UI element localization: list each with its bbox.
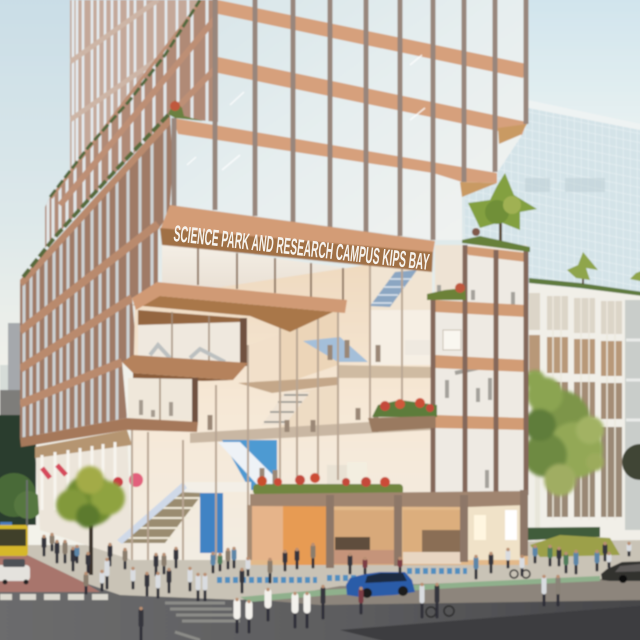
glass mullions (198, 248, 343, 300)
terrace greenery lower (23, 113, 170, 277)
bike lane red (0, 555, 100, 592)
crosswalk left (0, 594, 108, 600)
retail columns (330, 490, 524, 568)
windows row 3 (547, 382, 622, 419)
dark trees left (0, 415, 42, 525)
slab three (20, 418, 198, 447)
gravel band (260, 578, 640, 605)
planter flowers upper (372, 398, 437, 417)
front tower columns (174, 0, 526, 240)
plaza and road (0, 540, 640, 640)
upper tower left face (69, 0, 199, 171)
blue car (346, 572, 415, 598)
distant buildings left (0, 323, 22, 418)
terrace greenery mid (427, 283, 466, 300)
foliage (56, 466, 125, 528)
heads (44, 534, 629, 608)
storefront left wall (247, 505, 252, 560)
pedestrians (44, 534, 629, 640)
floor slab lower (190, 418, 432, 443)
big right tree (523, 370, 604, 548)
cyclists bikes (426, 570, 530, 617)
floor slab ground (185, 482, 251, 492)
atrium interior (130, 255, 432, 560)
slab two (122, 355, 248, 381)
terrace greenery upper (50, 0, 200, 197)
legs (44, 542, 629, 640)
bicycle racks (217, 571, 467, 580)
bay columns (433, 245, 526, 495)
stair upper (370, 270, 417, 307)
atrium right figures and boards (210, 340, 430, 487)
green lane (240, 576, 600, 602)
dark lower right road (340, 605, 640, 640)
blue mural lower (200, 493, 223, 553)
white coats (237, 592, 307, 616)
windows row 2 (529, 335, 622, 376)
ground floor left glass (35, 430, 143, 560)
tree on terrace (468, 173, 537, 241)
front tower bands (173, 0, 527, 183)
interior figures (439, 285, 513, 488)
right bays block (433, 245, 528, 495)
coloured tops (52, 537, 313, 584)
lamp post (26, 480, 28, 530)
window reflections (187, 55, 425, 170)
main sign band (160, 205, 435, 272)
atrium mullions (132, 258, 402, 560)
sky right (500, 0, 640, 140)
ground stair (117, 482, 203, 544)
sidewalk (27, 540, 640, 600)
foliage (523, 370, 604, 496)
planter slab upper (368, 416, 435, 432)
whiteboards (443, 330, 461, 350)
left street tree (56, 466, 125, 575)
yellow bus (0, 522, 28, 556)
retail soffit (250, 491, 527, 507)
glass between main band and slab (162, 243, 347, 300)
dark car right (601, 561, 640, 583)
small tree on white building roof (567, 252, 640, 284)
floor slab mid (238, 377, 337, 393)
wood soffit corner lower (460, 182, 497, 197)
wood soffit corner upper (498, 124, 527, 144)
terrace greenery right top (462, 228, 530, 252)
dark tops (44, 539, 605, 625)
windows row 4 (547, 427, 622, 517)
top terrace flowers (168, 100, 203, 121)
windows row 1 (529, 293, 622, 334)
white building right (529, 283, 640, 560)
roof garden right (529, 278, 640, 297)
retail storefront (247, 505, 528, 565)
crosswalk centre (165, 603, 240, 640)
stair mid (262, 392, 310, 425)
dark tree right edge (622, 444, 640, 480)
planter flowers lower (253, 473, 403, 495)
floor slab upper right (337, 365, 432, 378)
glass building behind right (460, 100, 640, 300)
main slab (132, 282, 347, 332)
window box one (138, 310, 247, 366)
white car (0, 559, 30, 584)
bay bands (435, 246, 528, 430)
stair mid blue (303, 337, 368, 362)
front tower glass (170, 0, 528, 240)
window box two (128, 378, 198, 422)
garden lawn and hedge right (490, 527, 620, 557)
lower tower left face (20, 100, 175, 440)
middle tower left face (45, 0, 218, 260)
warm walls (280, 310, 338, 385)
mural blue upper (222, 440, 277, 490)
